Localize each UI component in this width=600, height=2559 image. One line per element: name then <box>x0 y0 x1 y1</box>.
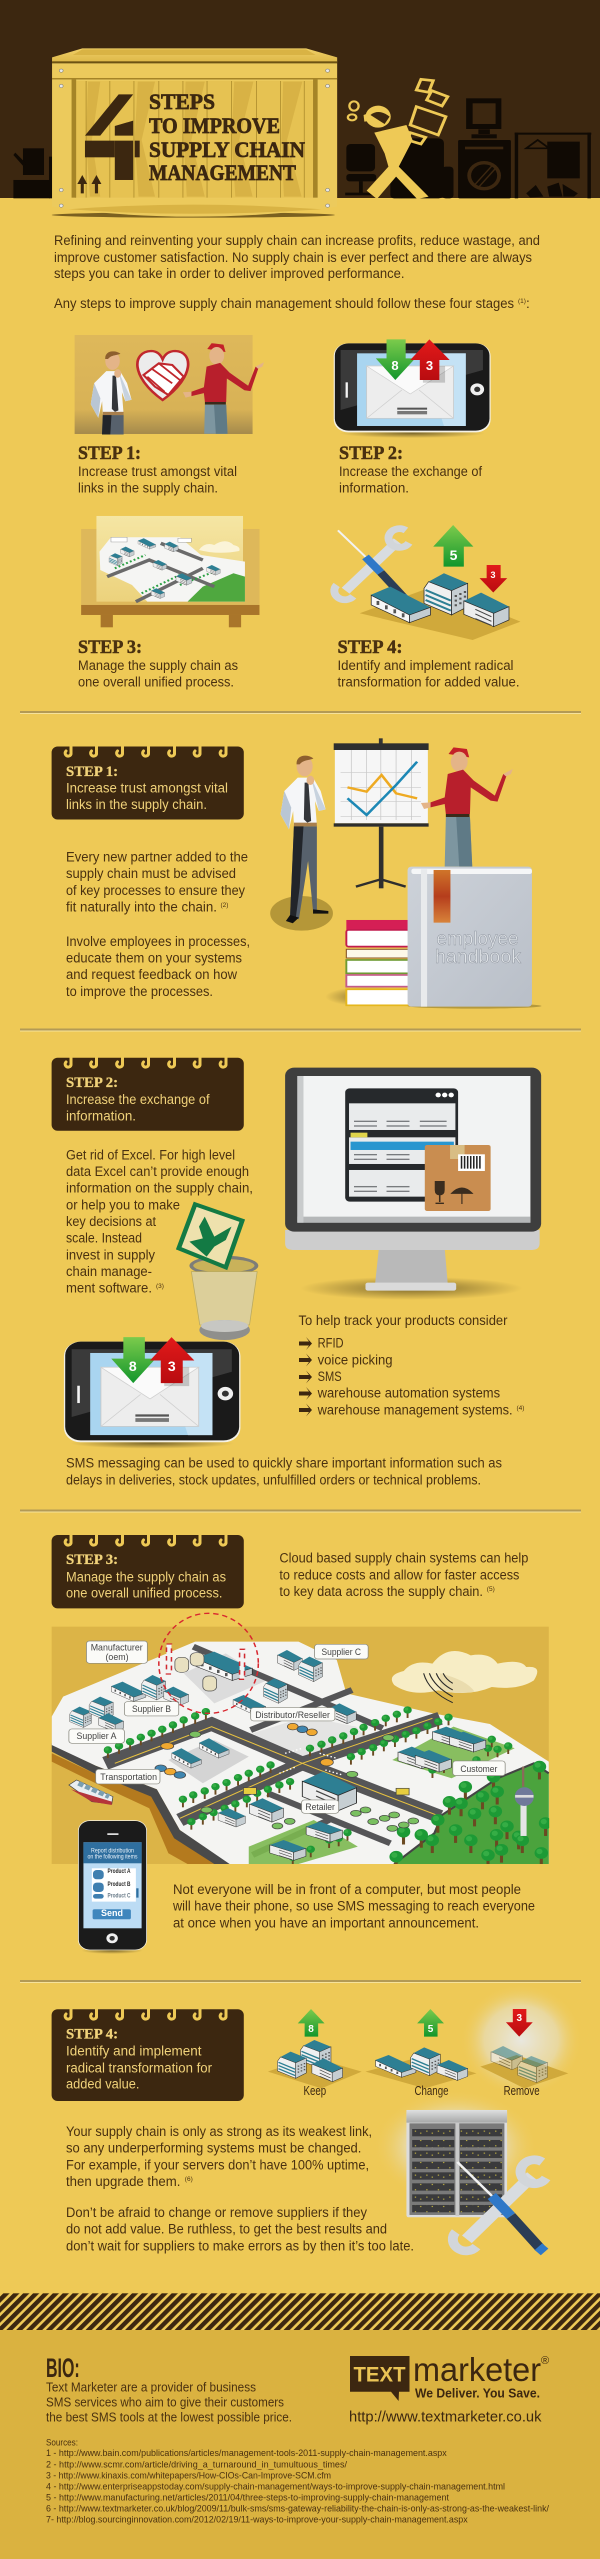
step 4 body text: Don’t be afraid to change or remove suppliers if they <box>66 2205 367 2220</box>
smartphone with report screen: Product B <box>108 1882 131 1888</box>
bio <box>46 2353 292 2425</box>
sms announcement text: at once when you have an important announcement. <box>173 1915 479 1930</box>
step 1 body text: Every new partner added to the <box>66 850 248 865</box>
sms announcement text: Not everyone will be in front of a computer, but most people <box>173 1882 521 1897</box>
cloud with signal <box>392 1651 537 1703</box>
logo: textmarketer: TEXT <box>354 2364 406 2387</box>
panel: step 3 detail <box>52 1532 552 1954</box>
track products list: voice picking <box>318 1352 393 1367</box>
notepad heading step 4: STEP 4: <box>66 2026 118 2042</box>
keep / change / remove icons: Remove <box>504 2084 540 2098</box>
step 4 body text: don’t wait for suppliers to make errors as by then it’s too late. <box>66 2238 414 2253</box>
track products list: To help track your products consider <box>298 1313 508 1328</box>
isometric supply chain map <box>52 1613 552 1870</box>
cloud text: (5) <box>487 1586 495 1593</box>
keep / change / remove icons: 8 <box>308 2024 314 2035</box>
man carrying boxes <box>348 79 448 199</box>
step 4 caption: Identify and implement radical <box>338 658 514 673</box>
roads <box>105 1647 440 1855</box>
step 2 body text <box>66 1147 253 1296</box>
sms announcement text <box>172 1882 535 1930</box>
track products list: warehouse management systems. <box>317 1402 513 1417</box>
step 1 caption: Increase trust amongst vital <box>78 464 237 479</box>
step 2 body text: (3) <box>156 1283 164 1290</box>
trees <box>104 1706 512 1865</box>
manufacturer highlight circle <box>159 1613 258 1713</box>
cloud text: Cloud based supply chain systems can help <box>279 1551 528 1566</box>
panel: step 2 detail: 3 <box>168 1358 176 1374</box>
illustration: presenters and chart <box>270 738 542 1009</box>
cloud text: to key data across the supply chain. <box>279 1584 483 1599</box>
map label text <box>76 1643 497 1813</box>
keep / change / remove icons: Keep <box>304 2084 326 2098</box>
panel: step 2 detail: 8 <box>129 1358 137 1374</box>
step 1 body text: fit naturally into the chain. <box>66 900 217 915</box>
step 4 body text: then upgrade them. <box>66 2174 180 2189</box>
intro text: : <box>526 296 530 311</box>
sources: 1 - http://www.bain.com/publications/articles/management-tools-2011-supply-chain-management.aspx <box>46 2448 447 2459</box>
icon: excel in bin <box>179 1204 258 1340</box>
sms text <box>66 1456 502 1487</box>
step 3 caption: STEP 3: <box>78 637 142 658</box>
server rack and tools <box>373 2090 546 2252</box>
panel: step 4 detail <box>52 1983 582 2253</box>
sms text: delays in deliveries, stock updates, unfulfilled orders or technical problems. <box>66 1472 481 1487</box>
notepad heading step 3: STEP 3: <box>66 1552 118 1568</box>
map label text: Supplier C <box>322 1647 361 1658</box>
smartphone with report screen: on the following items <box>88 1855 138 1861</box>
logo: textmarketer: ® <box>541 2355 549 2367</box>
step 2 body text: scale. Instead <box>66 1231 142 1246</box>
step 3 caption <box>78 637 238 690</box>
sources: 6 - http://www.textmarketer.co.uk/blog/2009/11/bulk-sms/sms-gateway-reliability-the-chain-is-only-as-strong-as-the-weakest-link/ <box>46 2504 549 2515</box>
sources: 7- http://blog.sourcinginnovation.com/2012/02/19/11-ways-to-improve-your-supply-chain-management.aspx <box>46 2515 468 2526</box>
employee handbook book <box>408 867 542 1009</box>
notepad heading step 2: STEP 2: <box>66 1075 118 1091</box>
notepad heading step 1: STEP 1: <box>66 764 118 780</box>
step 2 caption: STEP 2: <box>339 443 403 464</box>
notepad heading step 4: radical transformation for <box>66 2060 212 2075</box>
notepad heading step 1: Increase trust amongst vital <box>66 781 228 796</box>
smartphone with report screen: Product C <box>108 1894 131 1900</box>
step 1 caption: links in the supply chain. <box>78 481 218 496</box>
big stencil four <box>85 94 140 180</box>
step 1 body text: (2) <box>220 902 228 909</box>
notepad heading step 2: information. <box>66 1109 136 1124</box>
sms announcement text: will have their phone, so use SMS messaging to reach everyone <box>172 1899 535 1914</box>
step 4 body text: For example, if your servers don’t have 100% uptime, <box>66 2157 369 2172</box>
step 4 caption: STEP 4: <box>338 637 402 658</box>
map labels <box>69 1641 505 1813</box>
step 2 body text: ment software. <box>66 1281 152 1296</box>
map label text: Supplier A <box>76 1731 117 1742</box>
cloud text: to reduce costs and allow for faster access <box>279 1567 520 1582</box>
crate title text: SUPPLY CHAIN <box>149 137 305 162</box>
step 1 caption <box>78 443 237 496</box>
notepad heading step 1 <box>52 743 244 820</box>
step 2 body text: invest in supply <box>66 1247 155 1262</box>
tower <box>515 1767 534 1836</box>
intro text: Refining and reinventing your supply chain can increase profits, reduce wastage, and <box>54 233 540 248</box>
wooden crate title <box>52 48 337 218</box>
parcel <box>425 1145 491 1211</box>
sources <box>46 2437 549 2526</box>
notepad heading step 2 <box>52 1054 244 1131</box>
logo: textmarketer <box>349 2351 549 2426</box>
map label text: (oem) <box>106 1652 128 1663</box>
sms text: SMS messaging can be used to quickly share important information such as <box>66 1456 502 1471</box>
land <box>52 1642 549 1864</box>
step 1 body text: supply chain must be advised <box>66 866 236 881</box>
step 4 caption <box>338 637 520 690</box>
phone with sms envelope <box>64 1337 240 1449</box>
map label text: Supplier B <box>132 1704 171 1715</box>
silhouettes of household goods <box>13 98 591 198</box>
step 4 body text: so any underperforming systems must be changed. <box>66 2141 361 2156</box>
vehicles and parked cars <box>155 1723 419 1831</box>
handbook cover text: handbook <box>435 947 522 968</box>
crate title text: TO IMPROVE <box>149 113 280 138</box>
track products list: RFID <box>318 1336 344 1351</box>
manufacturer plant <box>166 1644 252 1691</box>
intro text <box>54 233 540 311</box>
step 1 body text: and request feedback on how <box>66 967 237 982</box>
step 3 caption: Manage the supply chain as <box>78 658 238 673</box>
track products list: (4) <box>516 1405 524 1412</box>
step 4 body text: (6) <box>185 2176 193 2183</box>
heart handshake <box>137 351 188 400</box>
step 2 caption <box>339 443 482 496</box>
notepad heading step 4 <box>52 2006 244 2101</box>
logo: textmarketer: marketer <box>413 2351 541 2388</box>
step 4 body text: do not add value. Be ruthless, to get the best results and <box>66 2222 387 2237</box>
intro text: (1) <box>518 298 526 305</box>
step 2 illustration: phone with sms envelope <box>334 339 491 438</box>
buildings <box>70 1644 486 1860</box>
step 2 caption: Increase the exchange of <box>339 464 482 479</box>
track products list: warehouse automation systems <box>317 1386 500 1401</box>
step 2 body text: key decisions at <box>66 1214 156 1229</box>
notepad heading step 4: Identify and implement <box>66 2044 202 2059</box>
step 3 caption: one overall unified process. <box>78 675 234 690</box>
notepad heading step 4: added value. <box>66 2076 140 2091</box>
sources: 2 - http://www.scmr.com/article/driving_a_turnaround_in_tumultuous_times/ <box>46 2459 347 2470</box>
step 1 body text <box>66 850 250 999</box>
intro text: steps you can take in order to deliver improved performance. <box>54 266 404 281</box>
step 3 illustration: map on table <box>81 516 259 627</box>
keep / change / remove icons: 5 <box>428 2024 434 2035</box>
notepad heading step 1: links in the supply chain. <box>66 797 207 812</box>
overview: four steps: 5 <box>450 547 458 563</box>
step 4 body text <box>66 2124 414 2253</box>
intro text: Any steps to improve supply chain management should follow these four stages <box>54 296 514 311</box>
forest <box>394 1763 549 1864</box>
smartphone with report screen: Send <box>101 1908 123 1918</box>
smartphone with report screen: Report distribution <box>91 1849 134 1855</box>
step 2 body text: chain manage- <box>66 1264 152 1279</box>
crate title text: MANAGEMENT <box>149 160 296 185</box>
monitor with supply chain software <box>285 1068 541 1300</box>
notepad heading step 2: Increase the exchange of <box>66 1092 210 1107</box>
step 2 body text: Get rid of Excel. For high level <box>66 1147 235 1162</box>
track products list <box>298 1313 524 1417</box>
crate title text: STEPS <box>149 89 215 114</box>
overview: four steps <box>75 335 520 690</box>
step 1 body text: to improve the processes. <box>66 984 213 999</box>
intro text: improve customer satisfaction. No supply chain is ever perfect and there are always <box>54 250 532 265</box>
this way up arrows <box>77 175 101 193</box>
sources: 3 - http://www.kinaxis.com/whitepapers/How-CIOs-Can-Improve-SCM.cfm <box>46 2470 331 2481</box>
smartphone with report screen <box>78 1821 147 1954</box>
panel: step 2 detail <box>52 1054 541 1487</box>
map label text: Retailer <box>305 1802 335 1813</box>
step 1 caption: STEP 1: <box>78 443 141 464</box>
header banner <box>0 0 600 199</box>
footer background <box>0 2330 600 2559</box>
panel: step 1 detail <box>52 738 542 1009</box>
map label text: Distributor/Reseller <box>255 1710 330 1721</box>
step 1 body text: Involve employees in processes, <box>66 934 250 949</box>
step 1 illustration <box>74 335 264 434</box>
bio: SMS services who aim to give their customers <box>46 2396 284 2410</box>
stack of books <box>325 920 409 1007</box>
map label text: Manufacturer <box>91 1643 143 1654</box>
cloud text <box>279 1551 528 1599</box>
bio: BIO: <box>46 2353 80 2383</box>
step 4 body text: Your supply chain is only as strong as its weakest link, <box>66 2124 372 2139</box>
notepad heading step 3 <box>52 1532 244 1608</box>
step 2 body text: data Excel can’t provide enough <box>66 1164 249 1179</box>
sources: Sources: <box>46 2437 78 2448</box>
track products list: SMS <box>318 1369 342 1384</box>
keep / change / remove icons <box>268 1983 582 2098</box>
keep / change / remove icons: Change <box>414 2084 449 2098</box>
step 2 caption: information. <box>339 481 409 496</box>
handbook cover text <box>435 929 522 968</box>
bio: Text Marketer are a provider of business <box>46 2381 256 2395</box>
chart on flipboard <box>334 738 429 888</box>
notepad heading step 3: Manage the supply chain as <box>66 1570 226 1585</box>
sources: 5 - http://www.manufacturing.net/articles/2011/04/three-steps-to-improving-supply-chain-management <box>46 2492 449 2503</box>
bio: the best SMS tools at the lowest possible price. <box>46 2411 292 2425</box>
step 1 body text: educate them on your systems <box>66 951 242 966</box>
step 4 caption: transformation for added value. <box>338 675 520 690</box>
sources: 4 - http://www.enterpriseappstoday.com/supply-chain-management/ways-to-improve-supply-chain-management.html <box>46 2481 505 2492</box>
map label text: Transportation <box>100 1772 157 1783</box>
step 2 body text: information on the supply chain, <box>66 1181 253 1196</box>
map label text: Customer <box>460 1764 497 1775</box>
handbook cover text: employee <box>436 929 518 950</box>
overview: four steps: 3 <box>426 358 433 373</box>
keep / change / remove icons: 3 <box>517 2013 523 2024</box>
smartphone with report screen: Product A <box>108 1869 131 1875</box>
step 1 body text: of key processes to ensure they <box>66 883 245 898</box>
crate title text <box>149 89 305 185</box>
step 2 body text: or help you to make <box>66 1197 180 1212</box>
step 4 illustration: tools and factory <box>334 525 520 640</box>
footer stripes <box>0 2293 600 2330</box>
ship <box>69 1780 113 1805</box>
notepad heading step 3: one overall unified process. <box>66 1586 222 1601</box>
logo: textmarketer: We Deliver. You Save. <box>415 2385 540 2400</box>
logo: textmarketer: http://www.textmarketer.co.uk <box>349 2409 542 2426</box>
overview: four steps: 3 <box>490 570 496 580</box>
overview: four steps: 8 <box>391 358 399 373</box>
